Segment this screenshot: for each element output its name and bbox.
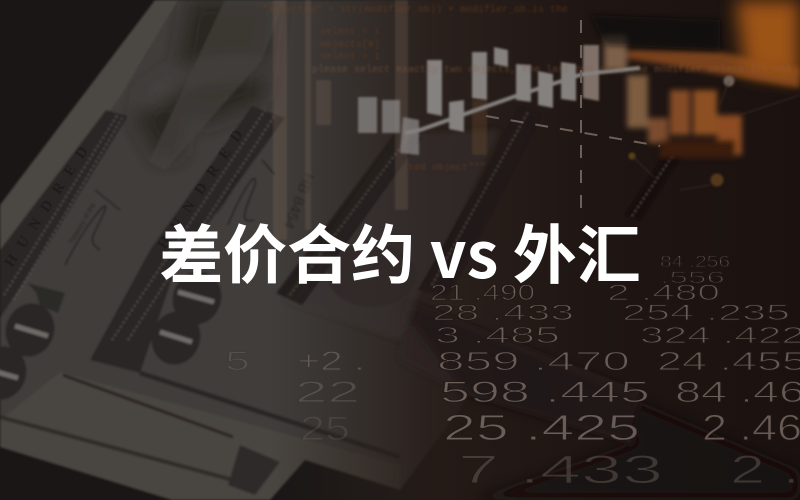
market numbers: +2 . [297, 346, 365, 376]
ornate band 1 [0, 110, 128, 318]
market numbers: 2 .480 [607, 280, 720, 305]
market numbers: 21 .490 [430, 280, 535, 305]
market numbers: 3 .485 [435, 322, 560, 348]
market numbers: 2 .46 [702, 407, 800, 448]
market numbers: 859 .470 [437, 346, 630, 376]
code text overlay: please select exactly two objects, the last one gets the modifier unless its not [312, 64, 792, 76]
trend line [405, 68, 640, 133]
chart nodes [628, 76, 800, 190]
blurred note area at top [133, 0, 275, 160]
ornate band 3 [277, 130, 422, 305]
market numbers: 5 [225, 346, 250, 376]
fold shadow line [63, 375, 233, 437]
banknote denomination text [2, 127, 247, 270]
market numbers: 24 .455 [657, 346, 800, 376]
code text overlay: objects[0] [320, 39, 380, 51]
market numbers: 598 .445 [440, 376, 650, 409]
code text overlay: select = 1 [320, 51, 380, 63]
code text overlay: select = 1 [320, 26, 380, 38]
dark stripe in the chart [590, 15, 720, 50]
market numbers: 25 [300, 410, 350, 448]
orange glow [735, 0, 800, 80]
vertical tan strips [273, 0, 487, 240]
portrait medallion shadow [327, 243, 417, 307]
market numbers: 254 .235 [622, 300, 790, 325]
faded notes on right [277, 108, 800, 500]
market numbers: 25 .425 [443, 407, 640, 448]
market numbers: 324 .422 [640, 322, 800, 348]
market numbers: 7 .433 [458, 448, 663, 492]
market numbers: 2 . [730, 448, 800, 492]
orange blurred candles [604, 35, 800, 158]
banknotes: Treasury of the [214, 172, 243, 216]
banknote denomination text: HUNDRED [2, 144, 92, 270]
ornate band 2 [90, 106, 285, 373]
pale candles [358, 45, 640, 155]
serif digit one [27, 283, 65, 313]
market numbers: 28 .433 [432, 300, 574, 325]
market numbers: 22 [295, 376, 360, 409]
banknotes: Treasury of the [68, 202, 97, 246]
small serial glyphs on note: HB 8454 [279, 171, 317, 231]
market numbers: .556 [660, 268, 725, 287]
light note edges [0, 0, 178, 252]
market numbers [225, 252, 800, 492]
title: 差价合约 vs 外汇 [159, 205, 641, 297]
hatch texture on bands [4, 110, 416, 340]
right side dark fade [270, 0, 800, 500]
code text overlay [262, 4, 792, 174]
dashed chart lines [486, 20, 660, 210]
signatures [65, 160, 275, 265]
banknote denomination text: HUNDRED [155, 127, 247, 252]
market numbers: 84 .46 [675, 376, 800, 409]
market numbers: 84 .256 [660, 252, 730, 271]
code text overlay: "selected" + str(modifier_ob)) + modifier_ob.is the [262, 4, 568, 16]
lower light band [0, 372, 400, 500]
code text overlay: ted object""" [408, 162, 486, 174]
ovals of the hundred [0, 264, 229, 407]
